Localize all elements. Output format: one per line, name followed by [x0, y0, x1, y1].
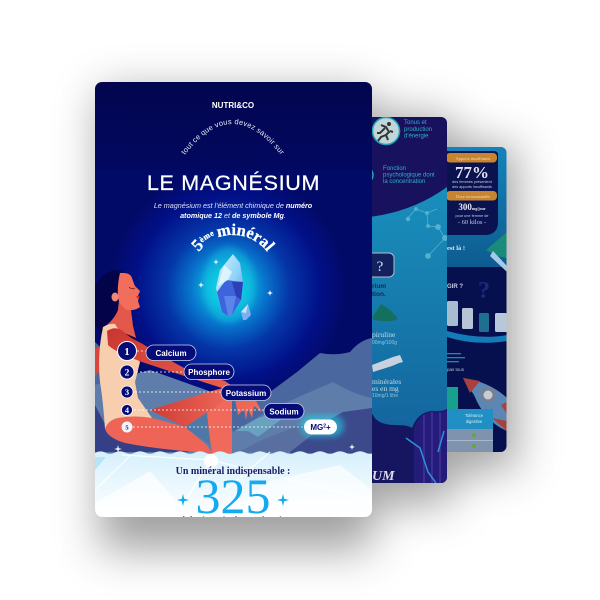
back mountains	[95, 338, 372, 460]
pill: calcium: Calcium	[155, 349, 187, 358]
text: eaux minérales: es en mg	[372, 384, 399, 393]
text: fonction psychologique: Fonction	[383, 166, 406, 172]
stat description: des femmes présentent	[452, 180, 493, 184]
icon: powder mound	[372, 304, 398, 321]
pill: MG2+: +	[326, 423, 331, 432]
stats panel	[447, 151, 498, 235]
text lines	[447, 353, 465, 362]
table: digestive	[466, 419, 483, 424]
intro text: Le magnésium est l'élément chimique de numéro	[154, 201, 312, 210]
intro text: atomique 12 et de symbole Mg.	[180, 211, 286, 220]
stat description: des apports insuffisants	[452, 185, 492, 189]
upper leg	[150, 388, 232, 453]
supplement bottles	[447, 301, 507, 332]
star right	[277, 494, 289, 506]
text: est là: est là !	[447, 245, 465, 252]
number badge 4: 4	[125, 406, 129, 415]
pill: phosphore	[184, 364, 234, 380]
background	[95, 82, 372, 517]
text: fonction psychologique: psychologique dont	[383, 172, 435, 178]
glow: crystal halo	[203, 247, 255, 323]
text: un minéral indispensable: Un minéral indispensable :	[176, 466, 290, 477]
number badge 1	[118, 342, 146, 360]
number badge 1: 1	[124, 346, 130, 358]
pill: sodium	[264, 404, 304, 419]
eye and lip	[129, 287, 135, 289]
label: dose recommandée: Dose recommandée	[456, 194, 490, 199]
shelf	[447, 331, 507, 343]
number badge 5: 5	[125, 424, 129, 432]
main card: ème	[198, 232, 214, 242]
icon: small crystal	[241, 304, 251, 320]
main card	[95, 82, 372, 517]
neck and shoulder skin	[103, 300, 136, 338]
number badge 4	[122, 404, 264, 416]
brush decoration	[486, 232, 507, 258]
lower thigh	[105, 416, 212, 453]
shin	[207, 393, 232, 453]
pill: MG2+: 2	[323, 424, 326, 430]
main card: minéral	[216, 224, 276, 252]
number badge 3: 3	[125, 387, 129, 397]
text: eaux minérales: minérales	[372, 377, 401, 386]
title fragment: UM: UM	[372, 469, 395, 484]
icon: bottle	[372, 355, 403, 372]
icon: large crystal	[216, 254, 243, 316]
text: tonus: Tonus et	[404, 120, 427, 126]
purple columns	[406, 410, 447, 483]
ice panel	[95, 451, 375, 517]
text: fonction psychologique: la concentration	[383, 179, 425, 185]
text: tonus: production	[404, 127, 432, 133]
text: pas tous: pas tous	[447, 367, 465, 372]
text: eau dose: 10mg/1 litre	[372, 393, 398, 399]
left back arm	[95, 347, 100, 376]
pill: sodium: Sodium	[269, 408, 299, 416]
number badge 2	[120, 365, 184, 379]
pill: MG2+: MG	[310, 423, 323, 432]
text: spiruline: piruline	[372, 330, 396, 339]
title: LE MAGNÉSIUM	[147, 170, 320, 195]
label: apports insuffisants: Apports insuffisants	[456, 156, 491, 161]
label: dose recommandée	[446, 191, 497, 200]
question box: ?	[377, 259, 384, 275]
rocket	[463, 378, 507, 431]
sparkles	[114, 259, 355, 453]
swimsuit torso	[99, 324, 152, 429]
curved subtitle	[172, 124, 294, 174]
green box	[447, 387, 458, 411]
pill: potassium: Potassium	[226, 389, 266, 398]
table: Tolérance	[465, 413, 484, 418]
stat 300 mg: 300mg/jour	[458, 202, 486, 212]
text: tonus: d'énergie	[404, 134, 429, 140]
pill: potassium	[221, 385, 271, 400]
stat weight: - 60 kilos -	[458, 219, 486, 226]
icon: partial ring	[372, 170, 374, 180]
mid mountains	[95, 370, 372, 460]
hair	[95, 270, 136, 345]
woman illustration	[95, 270, 262, 453]
logo: NUTRI&CO	[212, 101, 254, 110]
dark bottom landscape	[372, 409, 447, 483]
triangle gap	[185, 413, 210, 445]
back page: right	[447, 147, 506, 452]
question marks: ?	[478, 278, 490, 304]
text: magnesium: tion.	[372, 291, 386, 298]
middle page	[372, 117, 447, 483]
label: apports insuffisants	[446, 153, 497, 162]
dark purple top band	[372, 117, 447, 217]
big number 325: 325	[196, 468, 270, 524]
main card: tout ce que vous devez savoir sur	[181, 118, 284, 154]
lake	[235, 405, 300, 437]
infographic stack of pages	[72, 64, 544, 578]
drop shadow	[100, 92, 516, 550]
text: magnesium: rium	[372, 283, 386, 290]
number badge 2: 2	[125, 368, 130, 378]
text: spiruline dose: 00mg/100g	[372, 340, 397, 346]
main card: 5	[191, 239, 203, 252]
front mountains	[290, 408, 372, 460]
pill: phosphore: Phosphore	[188, 368, 230, 377]
stat weight: pour une femme de	[456, 214, 488, 218]
question box	[372, 252, 394, 278]
pill: MG2+	[300, 415, 344, 437]
heading: choisir: GIR ?	[447, 284, 463, 290]
curved heading: 5ème minéral	[190, 235, 276, 278]
face	[118, 273, 140, 310]
number badge 5	[122, 422, 304, 432]
icon: running figure	[372, 118, 400, 144]
table	[447, 409, 493, 452]
clipped caption: de la nécessaire du corps humain	[181, 516, 285, 522]
star left	[177, 494, 189, 506]
number badge 3	[121, 386, 222, 398]
pill: calcium	[146, 345, 196, 360]
ear	[112, 292, 118, 302]
stat 77%: 77%	[455, 163, 489, 182]
shoulder and arm	[107, 328, 262, 420]
molecule network	[406, 208, 448, 258]
